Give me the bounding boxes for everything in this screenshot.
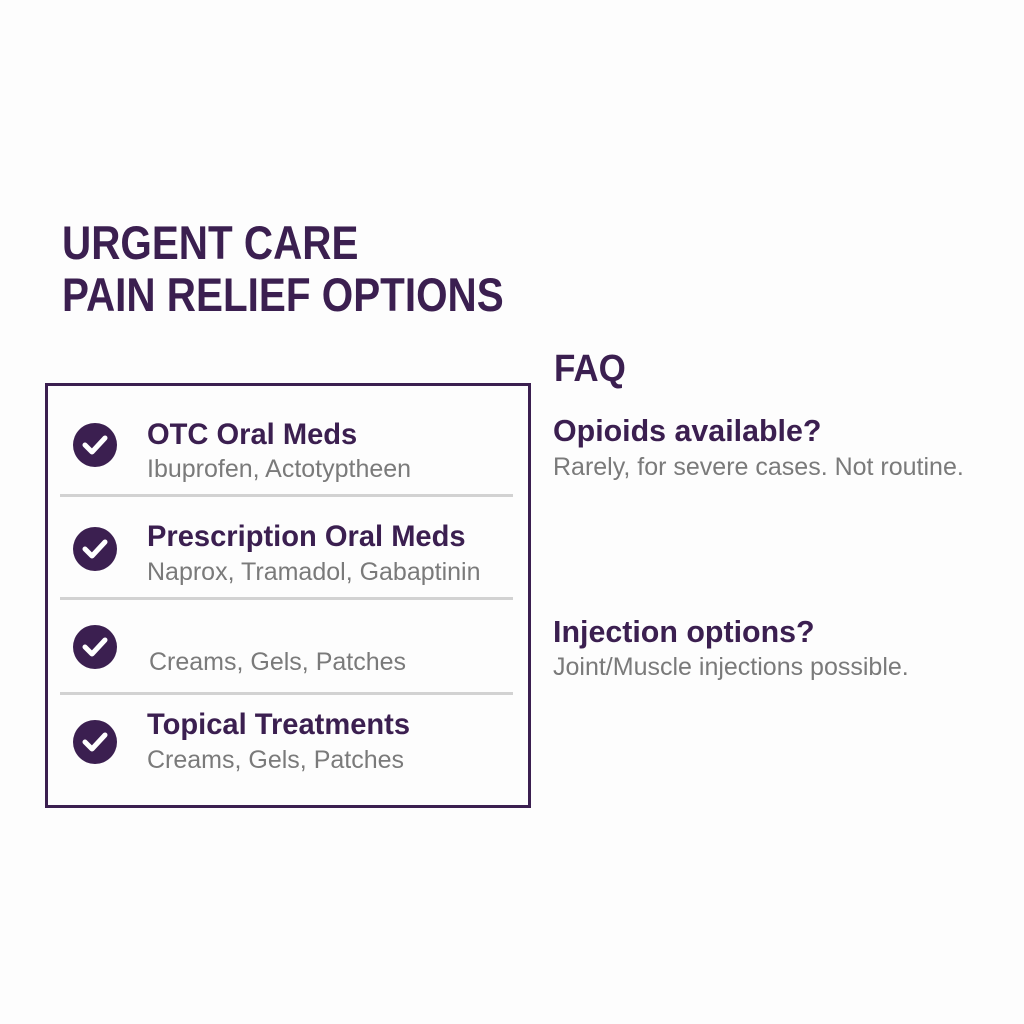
FAQ heading: FAQ: [554, 348, 626, 390]
icon: check 1: [73, 423, 117, 467]
panel: options: [45, 383, 531, 808]
text: creams 1: Creams, Gels, Patches: [149, 648, 406, 676]
heading: Topical: Topical Treatments: [147, 708, 410, 741]
text: OTC: Ibuprofen, Actotyptheen: [147, 455, 411, 483]
heading: OTC Oral Meds: OTC Oral Meds: [147, 418, 357, 451]
heading: Prescription: Prescription Oral Meds: [147, 520, 466, 553]
icon: check 4: [73, 720, 117, 764]
title: [62, 216, 504, 321]
text: creams 2: Creams, Gels, Patches: [147, 746, 404, 774]
text: prescription: Naprox, Tramadol, Gabaptinin: [147, 558, 481, 586]
FAQ a1: Rarely, for severe cases. Not routine.: [553, 453, 964, 481]
FAQ a2: Joint/Muscle injections possible.: [553, 653, 909, 681]
icon: check 2: [73, 527, 117, 571]
title: PAIN RELIEF OPTIONS: [62, 268, 504, 321]
FAQ q2: Injection options?: [553, 614, 815, 649]
icon: check 3: [73, 625, 117, 669]
title: URGENT CARE: [62, 216, 358, 269]
FAQ q1: Opioids available?: [553, 413, 821, 448]
